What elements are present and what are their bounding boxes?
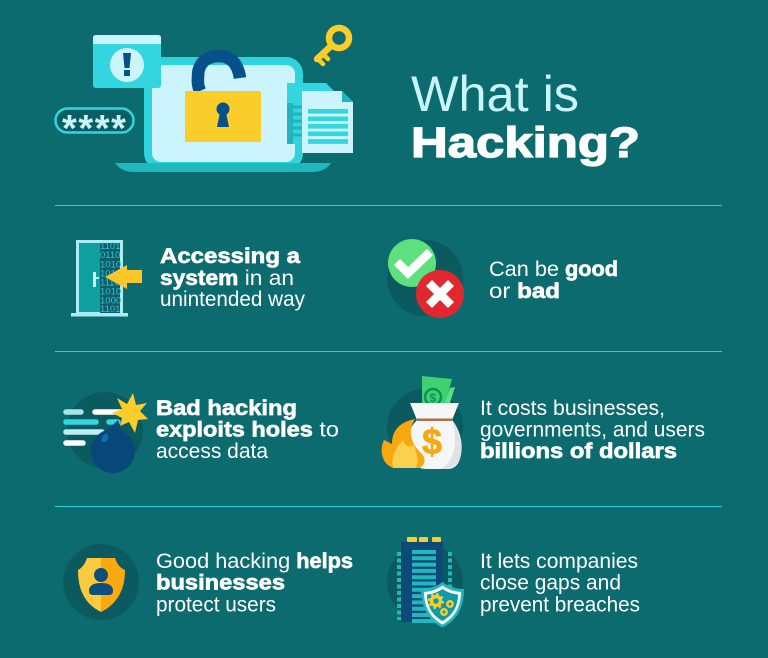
title: Hacking? xyxy=(411,119,640,167)
text: good hacking: Good hacking helps xyxy=(156,550,353,573)
text: accessing a system xyxy=(160,245,305,311)
icon: money bag with flames: $ xyxy=(422,421,442,462)
icon: money bag with flames: $ xyxy=(430,391,436,405)
icon: door with arrow: 1010 xyxy=(100,268,121,280)
icon: building with shield xyxy=(387,537,464,628)
text: good or bad xyxy=(489,258,618,303)
icon: door with arrow: 1010 xyxy=(100,260,121,270)
text: bad hacking: Bad hacking xyxy=(156,397,297,420)
text: costs businesses: It costs businesses, xyxy=(480,397,665,420)
text: lets companies: close gaps and xyxy=(480,572,621,594)
icon: check and cross xyxy=(387,239,464,318)
text: costs businesses xyxy=(480,397,705,463)
text: accessing a system: system in an xyxy=(160,267,294,290)
text: bad hacking xyxy=(156,397,339,463)
icon: bomb xyxy=(66,392,148,473)
icon: door with arrow: 1010 xyxy=(100,286,121,298)
icon: door with arrow: 1110 xyxy=(100,278,120,288)
text: costs businesses: governments, and users xyxy=(480,418,705,442)
text: good hacking: businesses xyxy=(156,572,285,594)
icon: door with arrow xyxy=(71,241,142,316)
icon: door with arrow: 1101 xyxy=(100,241,120,252)
title xyxy=(411,66,640,167)
key xyxy=(317,28,349,64)
text: costs businesses: billions of dollars xyxy=(480,440,677,463)
text: good or bad: Can be good xyxy=(489,258,618,281)
text: accessing a system: Accessing a xyxy=(160,245,300,268)
text: good or bad: or bad xyxy=(489,280,560,303)
password field: **** xyxy=(62,108,128,150)
text: good hacking xyxy=(156,550,353,616)
laptop xyxy=(115,61,331,172)
alert window xyxy=(93,35,161,88)
text: bad hacking: access data xyxy=(156,440,268,463)
text: lets companies: prevent breaches xyxy=(480,594,640,616)
text: bad hacking: exploits holes to xyxy=(156,418,339,442)
hero illustration: laptop with open padlock xyxy=(56,28,353,172)
icon: shield with user xyxy=(63,544,139,620)
text: lets companies xyxy=(480,550,640,616)
text: accessing a system: unintended way xyxy=(160,288,305,311)
text: good hacking: protect users xyxy=(156,594,276,616)
icon: door with arrow: 0110 xyxy=(100,250,120,261)
text: lets companies: It lets companies xyxy=(480,550,638,573)
icon: door with arrow: 1101 xyxy=(100,304,120,315)
open padlock xyxy=(185,56,261,142)
document xyxy=(287,83,353,153)
icon: door with arrow: 1000 xyxy=(100,296,121,306)
title: What is xyxy=(411,66,579,122)
icon: money bag with flames xyxy=(382,376,463,469)
